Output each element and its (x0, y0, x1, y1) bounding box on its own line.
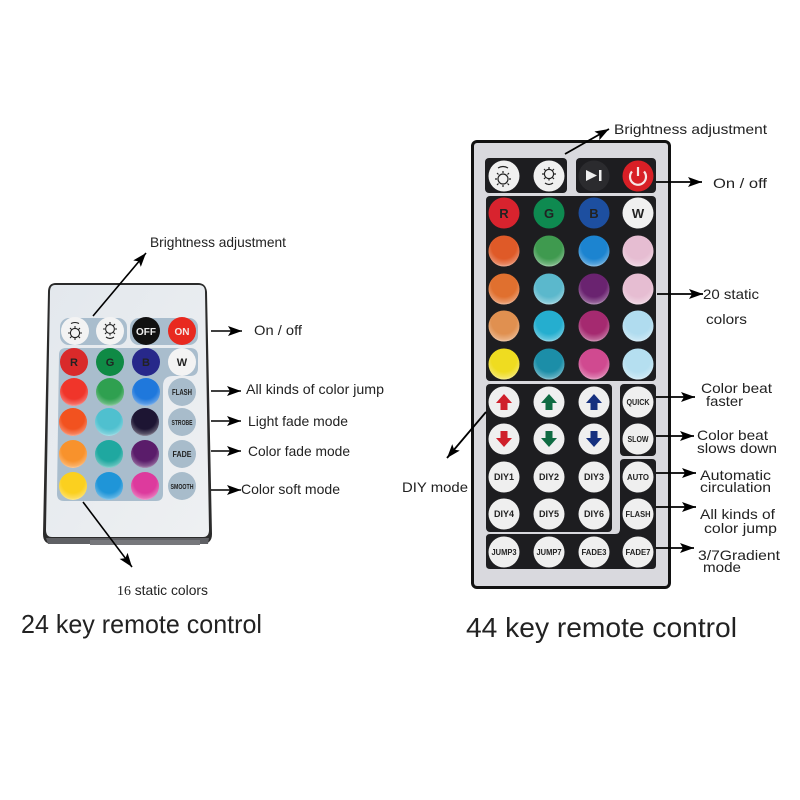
DIY buttons (488, 462, 610, 530)
jump and fade buttons: JUMP7 (536, 548, 562, 557)
label: beat faster: Color beat (701, 380, 772, 396)
DIY arrow buttons (488, 386, 610, 454)
label: beat slower: slows down (697, 440, 777, 456)
label: gradient: 3/7Gradient (698, 547, 780, 563)
title: 24 key remote control: 24 key remote control (21, 609, 262, 639)
label: DIY: DIY mode (402, 479, 468, 495)
label: on off: On / off (254, 322, 302, 338)
arrow: colour fade (211, 450, 241, 452)
DIY buttons: DIY4 (494, 509, 514, 519)
off button (132, 317, 160, 345)
label: colour soft: Color soft mode (241, 481, 340, 497)
label: light fade: Light fade mode (248, 413, 348, 429)
RGBW buttons: R (70, 357, 78, 369)
label: colour jump: All kinds of color jump (246, 381, 384, 397)
label: colour fade: Color fade mode (248, 443, 350, 459)
label: beat faster (701, 380, 772, 409)
title: 44 key remote control: 44 key remote control (466, 612, 737, 643)
arrow: brightness (93, 253, 146, 316)
label: static colours: 20 static (703, 286, 759, 302)
mode buttons: SMOOTH (170, 484, 194, 491)
RGBW buttons: R (499, 206, 509, 221)
mode buttons: STROBE (172, 418, 192, 427)
label: static colours: colors (706, 311, 747, 327)
panel: 24 key remote (43, 283, 212, 545)
label: brightness: Brightness adjustment (150, 234, 286, 250)
label: beat faster: faster (706, 393, 743, 409)
panel: 44 key remote (471, 140, 671, 589)
static colour buttons (59, 378, 160, 500)
jump and fade buttons: FADE3 (582, 548, 607, 557)
mode buttons: FLASH (172, 388, 192, 397)
label: colour jump: color jump (704, 520, 777, 536)
power button (622, 160, 654, 192)
arrow: static colours (83, 502, 132, 567)
label: beat slower (697, 427, 777, 456)
RGBW buttons: B (589, 206, 599, 221)
arrows: 44 key remote (447, 129, 703, 548)
jump and fade buttons: FADE7 (626, 548, 651, 557)
label: automatic: circulation (700, 479, 771, 495)
gloss on static colour buttons (59, 378, 160, 500)
speed and mode buttons (622, 386, 654, 530)
button panels (57, 318, 198, 501)
DIY buttons: DIY2 (539, 472, 559, 482)
label: colour jump: All kinds of (700, 506, 775, 522)
brightness buttons (488, 160, 564, 192)
label: gradient (698, 547, 780, 575)
on button (168, 317, 196, 345)
arrow: on off (656, 181, 702, 183)
label: colour jump (700, 506, 777, 536)
speed and mode buttons: QUICK (626, 398, 650, 407)
on button: ON (174, 326, 190, 338)
label: gradient: mode (703, 559, 741, 575)
arrow: DIY (447, 412, 486, 458)
arrow: light fade (211, 420, 241, 422)
RGBW buttons (488, 198, 654, 228)
brightness buttons (61, 317, 124, 345)
label: beat slower: Color beat (697, 427, 768, 443)
RGBW buttons (60, 348, 196, 376)
arrow: beat faster (656, 396, 695, 398)
RGBW buttons: G (106, 357, 114, 369)
arrow: brightness (565, 129, 609, 154)
RGBW buttons: B (142, 357, 150, 369)
label: automatic (700, 467, 771, 495)
speed and mode buttons: FLASH (626, 510, 651, 519)
DIY buttons: DIY5 (539, 509, 559, 519)
gloss on static colour buttons (488, 236, 654, 380)
RGBW buttons: G (544, 206, 554, 221)
labels: 44 key remote (402, 121, 780, 575)
play pause button (578, 160, 610, 192)
arrow: colour jump (656, 506, 696, 508)
jump and fade buttons: JUMP3 (492, 548, 517, 557)
label: automatic: Automatic (700, 467, 771, 483)
arrows: 24 key remote (83, 253, 242, 567)
arrow: colour jump (211, 390, 241, 392)
speed and mode buttons: SLOW (628, 435, 649, 444)
arrow: beat slower (656, 435, 694, 437)
label: brightness: Brightness adjustment (614, 121, 767, 137)
static colour buttons (488, 236, 654, 380)
DIY buttons: DIY1 (494, 472, 514, 482)
RGBW buttons: W (177, 357, 188, 369)
button panels (485, 158, 656, 569)
arrow: gradient (656, 547, 694, 549)
arrow: static colours (657, 293, 703, 295)
off button: OFF (136, 326, 157, 338)
DIY buttons: DIY6 (584, 509, 604, 519)
RGBW buttons: W (632, 206, 645, 221)
label: static colours (703, 286, 759, 327)
remote body (43, 283, 212, 545)
label: on off: On / off (713, 175, 767, 191)
arrow: on off (211, 330, 242, 332)
arrow: colour soft (211, 489, 241, 491)
mode buttons (168, 378, 196, 500)
remote body (471, 140, 671, 589)
DIY buttons: DIY3 (584, 472, 604, 482)
labels: 24 key remote (117, 234, 384, 599)
label: static colours: 16 static colors (117, 582, 208, 599)
jump and fade buttons (488, 536, 654, 568)
mode buttons: FADE (172, 450, 192, 459)
speed and mode buttons: AUTO (627, 473, 649, 482)
arrow: automatic (656, 472, 696, 474)
